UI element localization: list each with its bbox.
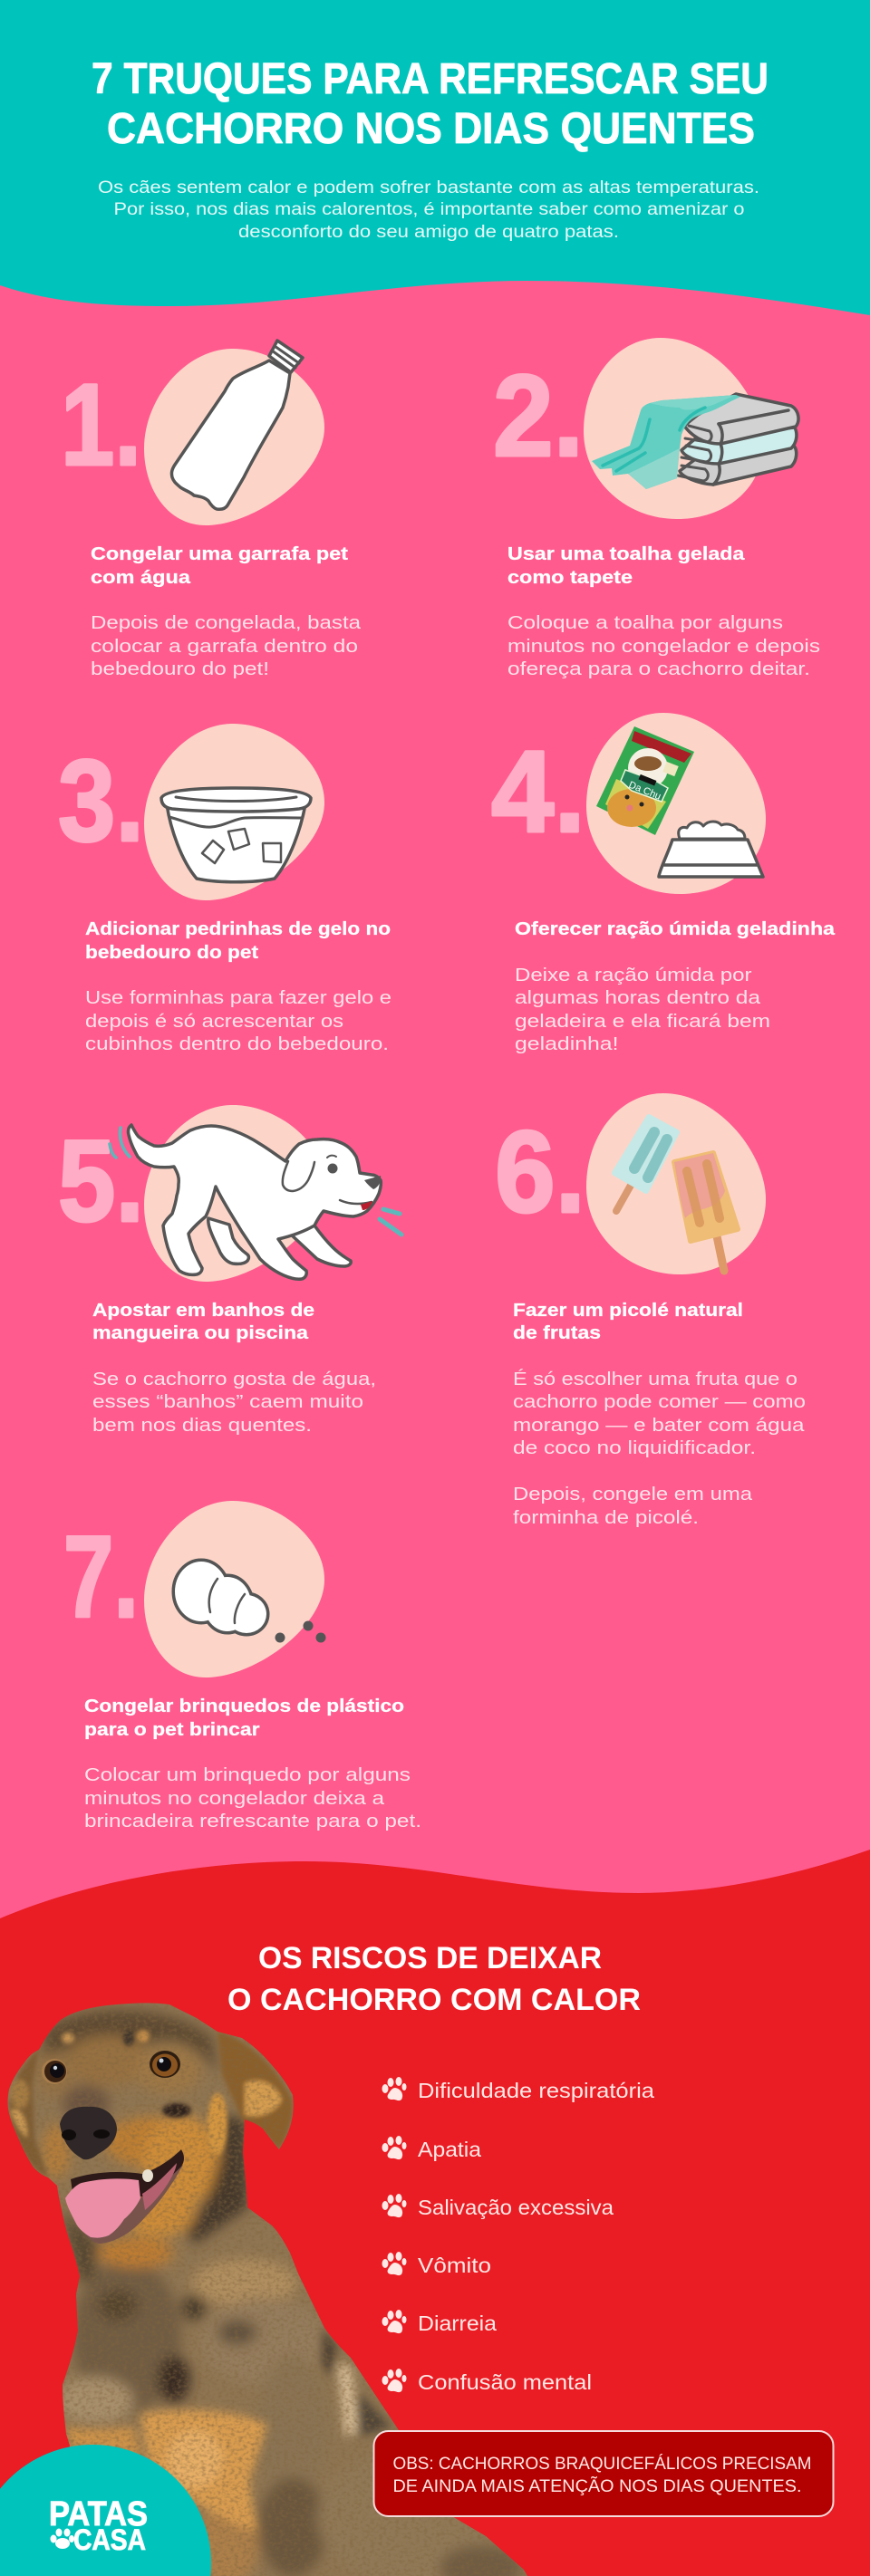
risks heading: OS RISCOS DE DEIXAR [258, 1941, 602, 1975]
tip 7 body [84, 1764, 421, 1831]
item: apathy: Apatia [418, 2138, 481, 2161]
tip 3: ice in bowl [58, 724, 392, 1054]
footer wave: red [0, 1850, 870, 2576]
icon: teal popsicle [614, 1117, 677, 1211]
tip 2 body: ofereça para o cachorro deitar. [508, 658, 810, 679]
item: mental confusion: Confusão mental [418, 2370, 592, 2394]
tip 6 heading: Fazer um picolé natural [513, 1301, 743, 1321]
header wave: teal [0, 0, 870, 315]
tip 6 body: forminha de picolé. [513, 1507, 699, 1528]
tip 6 heading: de frutas [513, 1323, 601, 1343]
icon: food pouch: Da Chu [627, 780, 662, 803]
dog mouth [65, 2149, 184, 2244]
tip 3 number: 3. [58, 736, 144, 866]
tip 5 body [92, 1369, 376, 1436]
icon: pink popsicle [674, 1153, 738, 1271]
tip 7 body: minutos no congelador deixa a [84, 1788, 385, 1809]
tip 1 body: bebedouro do pet! [91, 658, 269, 679]
risks heading: O CACHORRO COM CALOR [227, 1983, 641, 2017]
tip 1 number: 1. [61, 360, 141, 490]
title: 7 TRUQUES PARA REFRESCAR SEU [92, 55, 768, 103]
tip 2 heading: como tapete [508, 568, 633, 588]
intro text: Os cães sentem calor e podem sofrer bastante com as altas temperaturas. [98, 178, 759, 197]
tip 4 body: algumas horas dentro da [515, 987, 761, 1008]
tip 7 body: Colocar um brinquedo por alguns [84, 1764, 411, 1785]
tip 4 body: geladinha! [515, 1033, 618, 1054]
item: vomiting [382, 2252, 491, 2277]
tip 7: frozen toys [63, 1501, 421, 1831]
item: mental confusion [382, 2369, 592, 2394]
tip 2 body [508, 612, 820, 679]
tip 6 heading [513, 1301, 743, 1343]
tip 2 blob [584, 338, 763, 519]
risks heading [227, 1941, 641, 2017]
tip 7 number: 7. [63, 1513, 139, 1642]
tip 4: wet food [491, 713, 836, 1054]
tip 2 heading: Usar uma toalha gelada [508, 544, 746, 564]
tip 3 blob [144, 724, 324, 900]
tip 3 body: cubinhos dentro do bebedouro. [85, 1033, 389, 1054]
tip 7 heading [84, 1697, 404, 1740]
tip 7 heading: Congelar brinquedos de plástico [84, 1697, 404, 1716]
icon: food pouch [596, 726, 694, 835]
callout: note [373, 2431, 834, 2516]
tip 3 heading: Adicionar pedrinhas de gelo no [85, 919, 391, 939]
tip 4 body: geladeira e ela ficará bem [515, 1011, 770, 1032]
tip 1: frozen bottle [61, 341, 362, 679]
tip 6 number: 6. [495, 1108, 585, 1237]
intro text: Por isso, nos dias mais calorentos, é importante saber como amenizar o [114, 200, 745, 219]
tip 3 body: Use forminhas para fazer gelo e [85, 987, 392, 1008]
tip 2 heading [508, 544, 746, 588]
tip 3 heading: bebedouro do pet [85, 943, 258, 963]
tip 2 number: 2. [493, 351, 584, 481]
tip 2: cold towel [493, 338, 820, 679]
callout: note: DE AINDA MAIS ATENÇÃO NOS DIAS QUENTES. [393, 2476, 801, 2496]
tip 1 blob [144, 349, 324, 525]
callout: note: OBS: CACHORROS BRAQUICEFÁLICOS PRECISAM [393, 2455, 812, 2474]
item: diarrhea: Diarreia [418, 2312, 497, 2335]
icon: toy [175, 1562, 266, 1633]
tip 5 heading [92, 1301, 314, 1343]
icon: teal towel [592, 395, 740, 489]
title [92, 55, 768, 153]
tip 7 blob [144, 1501, 324, 1677]
tip 6 blob [586, 1093, 766, 1274]
tip 1 heading: Congelar uma garrafa pet [91, 544, 348, 564]
tip 1 heading [91, 544, 348, 588]
tip 6 body: É só escolher uma fruta que o [513, 1369, 798, 1389]
tip 7 body: brincadeira refrescante para o pet. [84, 1811, 421, 1831]
tip 2 body: Coloque a toalha por alguns [508, 612, 783, 633]
title: CACHORRO NOS DIAS QUENTES [107, 105, 755, 153]
tip 1 heading: com água [91, 568, 191, 588]
item: difficulty breathing: Dificuldade respiratória [418, 2079, 654, 2102]
logo: CASA [73, 2523, 146, 2556]
tip 6 body: de coco no liquidificador. [513, 1437, 756, 1458]
dog eyes [42, 2051, 180, 2084]
tip 4 heading: Oferecer ração úmida geladinha [515, 919, 836, 939]
tip 6 body: cachorro pode comer — como [513, 1391, 806, 1412]
tip 4 number: 4. [491, 727, 585, 857]
icon: food bowl [659, 822, 763, 877]
tip 5 number: 5. [58, 1117, 144, 1246]
tip 7 heading: para o pet brincar [84, 1720, 260, 1740]
icon: water splashes [110, 1128, 401, 1235]
tip 5 body: esses “banhos” caem muito [92, 1391, 363, 1412]
tip 1 body: Depois de congelada, basta [91, 612, 362, 633]
tip 5: hose bath [58, 1105, 401, 1436]
tip 5 heading: mangueira ou piscina [92, 1323, 309, 1343]
logo [0, 2445, 211, 2576]
icon: bowl with ice [161, 788, 311, 882]
dog photo [0, 1993, 544, 2576]
tip 6 body [513, 1369, 806, 1528]
icon: white dog [128, 1125, 381, 1279]
item: excessive salivation: Salivação excessiva [418, 2196, 614, 2219]
intro text [98, 178, 759, 242]
tip 6: fruit popsicle [495, 1093, 806, 1528]
item: apathy [382, 2136, 481, 2161]
tip 4 blob [586, 713, 766, 894]
tip 5 body: Se o cachorro gosta de água, [92, 1369, 376, 1389]
tip 1 body: colocar a garrafa dentro do [91, 636, 358, 657]
dog nose [60, 2107, 117, 2159]
risks list [382, 2077, 654, 2394]
fur noise [0, 1993, 544, 2576]
icon: bottle [171, 341, 303, 509]
icon: towels [678, 394, 798, 485]
tip 3 body [85, 987, 392, 1054]
intro text: desconforto do seu amigo de quatro patas. [238, 223, 619, 242]
tip 2 body: minutos no congelador e depois [508, 636, 820, 657]
logo: PATAS [49, 2495, 148, 2533]
tip 5 heading: Apostar em banhos de [92, 1301, 314, 1321]
tip 5 blob [144, 1105, 324, 1282]
icon: dots [276, 1621, 326, 1643]
item: vomiting: Vômito [418, 2254, 491, 2277]
tip 6 body: Depois, congele em uma [513, 1484, 753, 1504]
tip 3 body: depois é só acrescentar os [85, 1011, 343, 1032]
tip 3 heading [85, 919, 391, 963]
item: diarrhea [382, 2310, 497, 2335]
tip 1 body [91, 612, 362, 679]
tip 6 body: morango — e bater com água [513, 1415, 805, 1436]
tip 4 body [515, 965, 770, 1054]
tip 5 body: bem nos dias quentes. [92, 1415, 312, 1436]
tip 4 body: Deixe a ração úmida por [515, 965, 752, 985]
